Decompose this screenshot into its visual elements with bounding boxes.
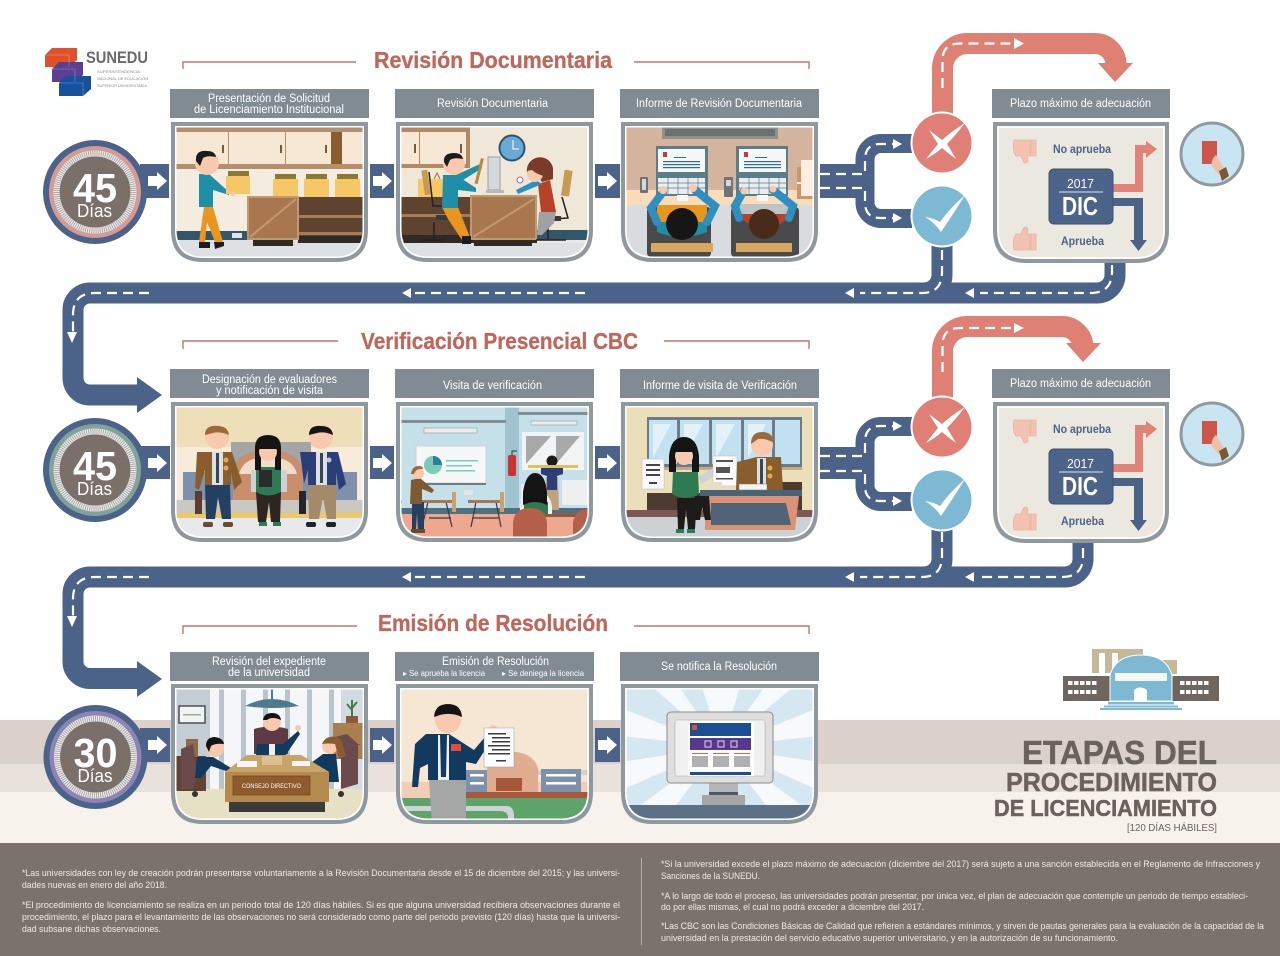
date box: 2017 (1067, 176, 1094, 191)
illustration: two analysts at computers (621, 122, 818, 262)
decision panel: Aprueba (1061, 516, 1105, 528)
arrow: no aprueba (1113, 421, 1157, 472)
heading: Verificación Presencial CBC: Verificación Presencial CBC (361, 328, 638, 354)
badge: 30 días row 3: 30 (74, 730, 118, 776)
heading: Revisión Documentaria (183, 47, 809, 73)
icon: row 1 rejected (910, 112, 974, 174)
step: Presentación de Solicitud (170, 89, 369, 262)
footnotes right: *A lo largo de todo el proceso, las universidades podrán presentar, por única vez, el plan de adecuación que contemple un periodo de tiempo estableci- (661, 891, 1248, 901)
date box (1049, 449, 1113, 504)
main title (994, 734, 1217, 834)
date box: DIC (1062, 471, 1098, 501)
step: Informe de Revisión Documentaria: Informe de Revisión Documentaria (636, 98, 803, 110)
icon: university building (1063, 649, 1219, 710)
step: Emisión de Resolución: Emisión de Resolución (442, 656, 549, 668)
badge: 30 días row 3 (44, 705, 148, 809)
footnotes right: *Si la universidad excede el plazo máximo de adecuación (diciembre del 2017) será sujeto a una sanción establecida en el Reglamento de Infracciones y (661, 859, 1260, 869)
step: Plazo máximo row 2: Plazo máximo de adecuación (1010, 378, 1151, 390)
step: Designación de evaluadores: Designación de evaluadores (202, 374, 337, 386)
icon: red card row 2 (1181, 403, 1243, 465)
icon: red card row 1 (1181, 123, 1243, 185)
icon: thumb up (1013, 507, 1036, 530)
footnotes left: *El procedimiento de licenciamiento se realiza en un periodo total de 120 días hábiles. Si es que alguna universidad recibiera observaciones durante el (22, 900, 620, 910)
road: row 1 fork (820, 139, 912, 223)
main title: DE LICENCIAMIENTO (994, 795, 1217, 821)
icon: thumb down (1013, 420, 1036, 443)
arrow: row 2 no aprueba road (942, 323, 1101, 402)
badge: 45 días row 1: 45 (73, 165, 117, 211)
step: Designación de evaluadores (170, 369, 369, 542)
badge: 45 días row 1: Días (77, 201, 112, 221)
decision panel: No aprueba (1053, 144, 1112, 156)
decision panel (995, 404, 1167, 541)
logo: SUNEDU (45, 48, 148, 96)
illustration: man storing boxes (171, 122, 368, 262)
step: Revisión Documentaria: Revisión Documentaria (437, 98, 549, 110)
icon: row 1 approved (910, 184, 974, 248)
date box: 2017 (1067, 456, 1094, 471)
footnotes left (22, 868, 620, 934)
step: Se notifica la Resolución (620, 652, 819, 824)
step: Informe de Revisión Documentaria (620, 89, 819, 262)
step: Visita de verificación: Visita de verificación (443, 380, 542, 392)
illustration: delivering report (621, 402, 818, 542)
step: Emisión de Resolución (395, 652, 594, 824)
icon: row 2 rejected (910, 396, 974, 458)
illustration: board meeting: CONSEJO DIRECTIVO (242, 783, 301, 790)
date box (1049, 169, 1113, 224)
badge: 45 días row 2: 45 (73, 443, 117, 489)
logo: SUNEDU: SUPERIOR UNIVERSITARIA (97, 83, 147, 88)
illustration: three evaluators (171, 402, 368, 542)
step: Plazo máximo row 1: Plazo máximo de adecuación (1010, 98, 1151, 110)
logo: SUNEDU: SUPERINTENDENCIA (97, 69, 140, 74)
footnotes right: universidad en la prestación del servicio educativo superior universitario, y en la autorización de su funcionamiento. (661, 933, 1118, 943)
illustration: reviewers at desk (396, 122, 593, 262)
illustration: classroom inspection (396, 402, 593, 542)
step: Plazo máximo row 2 (992, 369, 1170, 541)
road: row 1 return road (67, 240, 1115, 413)
step: Plazo máximo row 1 (992, 89, 1170, 261)
step: Informe de visita de Verificación: Informe de visita de Verificación (643, 380, 797, 392)
arrow: no aprueba (1113, 141, 1157, 192)
footer (0, 843, 1280, 956)
illustration: board meeting (171, 684, 368, 824)
step: Revisión del expediente: Revisión del expediente (212, 656, 326, 668)
step: Presentación de Solicitud: Presentación de Solicitud (208, 93, 330, 105)
main title: [120 DÍAS HÁBILES] (1127, 821, 1217, 834)
step: Revisión del expediente (170, 652, 369, 824)
step: Designación de evaluadores: y notificación de visita (216, 385, 324, 397)
footnotes left: procedimiento, el plazo para el levantamiento de las observaciones no será considerado como parte del periodo previsto (120 días) hasta que la universi- (22, 912, 620, 922)
badge: 45 días row 1 (43, 140, 147, 244)
decision panel (995, 124, 1167, 261)
connectors between steps (140, 164, 620, 762)
footnotes left: dades nuevas en enero del año 2018. (22, 880, 167, 890)
heading: Revisión Documentaria: Revisión Documentaria (374, 47, 612, 73)
road: row 2 fork (820, 421, 912, 506)
illustration: monitor with website (621, 684, 818, 824)
footnotes left: *Las universidades con ley de creación podrán presentarse voluntariamente a la Revisión Documentaria desde el 15 de diciembre del 2015; y las universi- (22, 868, 620, 878)
step: Visita de verificación (395, 369, 594, 542)
arrow: row 1 no aprueba road (942, 38, 1133, 120)
main title: ETAPAS DEL (1022, 734, 1217, 771)
date box: DIC (1062, 191, 1098, 221)
step: Emisión de Resolución: ▸ Se deniega la licencia (502, 669, 585, 678)
footnotes right: do por ellas mismas, el cual no podrá exceder a diciembre del 2017. (661, 902, 924, 912)
road: row 2 return road (67, 525, 1083, 697)
heading: Emisión de Resolución: Emisión de Resolución (378, 610, 608, 636)
decision panel: Aprueba (1061, 236, 1105, 248)
footnotes left: dad subsane dichas observaciones. (22, 924, 161, 934)
illustration: man with resolution (396, 684, 593, 824)
heading: Verificación Presencial CBC (183, 328, 809, 354)
arrow: aprueba (1113, 198, 1147, 251)
step: Revisión Documentaria (395, 89, 594, 262)
main title: PROCEDIMIENTO (1006, 767, 1217, 797)
footnotes right: *Las CBC son las Condiciones Básicas de Calidad que refieren a estándares mínimos, y sirven de pautas generales para la evaluación de la capacidad de la (661, 921, 1264, 931)
arrow: aprueba (1113, 478, 1147, 531)
step: Informe de visita de Verificación (620, 369, 819, 542)
icon: thumb up (1013, 227, 1036, 250)
logo: SUNEDU: NACIONAL DE EDUCACIÓN (97, 76, 148, 81)
decision panel: No aprueba (1053, 424, 1112, 436)
step: Revisión del expediente: de la universidad (228, 667, 310, 679)
badge: 45 días row 2 (43, 418, 147, 522)
badge: 45 días row 2: Días (77, 479, 112, 499)
heading: Emisión de Resolución (183, 610, 809, 636)
footnotes right: Sanciones de la SUNEDU. (661, 871, 760, 881)
icon: row 2 approved (910, 468, 974, 532)
step: Se notifica la Resolución: Se notifica la Resolución (661, 661, 777, 673)
badge: 30 días row 3: Días (78, 766, 112, 786)
footnotes right (661, 859, 1264, 943)
step: Emisión de Resolución: ▸ Se aprueba la licencia (403, 669, 486, 678)
step: Presentación de Solicitud: de Licenciamiento Institucional (194, 104, 344, 116)
icon: thumb down (1013, 140, 1036, 163)
logo: SUNEDU: SUNEDU (86, 48, 148, 67)
